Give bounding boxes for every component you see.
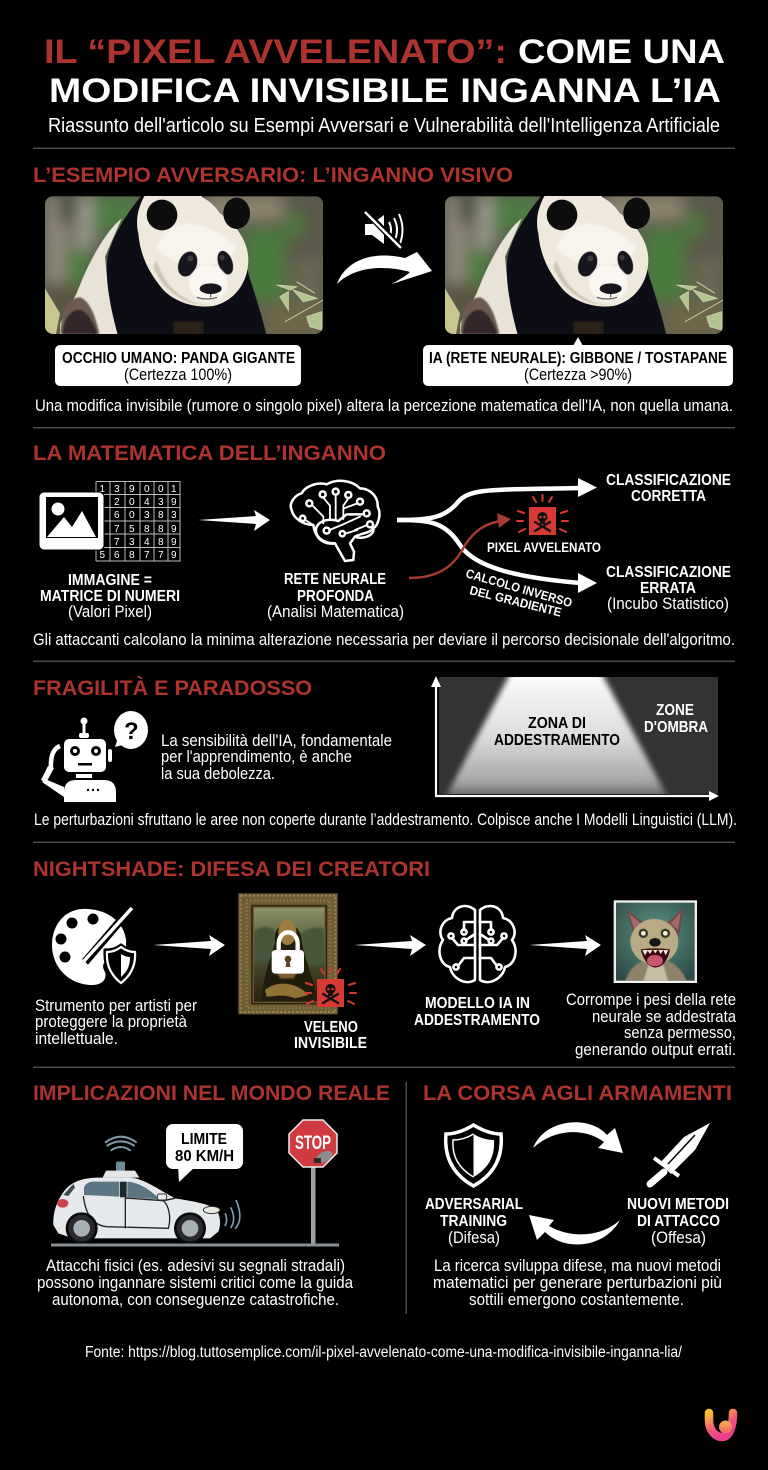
text: sensitivity (161, 731, 392, 783)
text: physical attacks: autonoma, con conseguenze catastrofiche. (52, 1290, 339, 1309)
icon: number matrix: 2 (114, 497, 120, 508)
stop sign (289, 1120, 337, 1244)
heading: LA CORSA AGLI ARMAMENTI (423, 1082, 732, 1105)
speech bubble: speed limit (166, 1124, 243, 1182)
text: sensitivity: la sua debolezza. (161, 764, 275, 783)
title: IL “PIXEL AVVELENATO”: (44, 33, 507, 71)
text: physical attacks: possono ingannare sistemi critici come la guida (37, 1273, 353, 1292)
arrow: wrong branch (397, 520, 597, 593)
label: adversarial training: TRAINING (440, 1213, 507, 1230)
icon: number matrix: 7 (114, 537, 120, 548)
icon: number matrix: 7 (144, 550, 150, 561)
icon: number matrix: 0 (129, 497, 135, 508)
icon: number matrix: 8 (158, 537, 164, 548)
label: wrong classification: ERRATA (640, 580, 696, 597)
label: inverse gradient: CALCOLO INVERSO (464, 566, 574, 610)
label: correct classification: CLASSIFICAZIONE (606, 472, 731, 489)
label: invisible poison (294, 1019, 367, 1052)
icon: number matrix: 1 (100, 484, 106, 495)
painting: protected artwork (238, 893, 338, 1014)
icon: number matrix (96, 482, 180, 561)
icon: number matrix: 9 (171, 550, 177, 561)
icon: palette with shield (52, 906, 137, 985)
icon: number matrix: 0 (158, 484, 164, 495)
arrow: attack to defense (529, 1215, 620, 1244)
label: neural network (423, 337, 733, 386)
text: physical attacks (37, 1256, 353, 1309)
heading: FRAGILITÀ E PARADOSSO (33, 677, 312, 700)
icon: poison pixel (517, 495, 568, 535)
label: wrong classification (606, 564, 731, 613)
source line: Fonte: https://blog.tuttosemplice.com/il-pixel-avvelenato-come-una-modifica-invisibile-inganna-lia/ (85, 1344, 683, 1361)
icon: number matrix: 6 (114, 510, 120, 521)
icon: number matrix: 5 (100, 550, 106, 561)
text: physical attacks: Attacchi fisici (es. adesivi su segnali stradali) (46, 1256, 345, 1275)
label: poison pixel: PIXEL AVVELENATO (487, 540, 601, 555)
speech bubble: speed limit: LIMITE (181, 1131, 227, 1148)
icon: number matrix: 8 (144, 524, 150, 535)
panel: adversarial example (33, 164, 733, 415)
label: adversarial training: ADVERSARIAL (425, 1196, 523, 1213)
label: human eye: OCCHIO UMANO: PANDA GIGANTE (62, 350, 295, 367)
chart: training zone: ADDESTRAMENTO (494, 732, 620, 749)
title: MODIFICA INVISIBILE INGANNA L’IA (49, 72, 721, 110)
label: new attack methods: NUOVI METODI (627, 1196, 729, 1213)
text: arms race: La ricerca sviluppa difese, ma nuovi metodi (434, 1256, 721, 1275)
text: arms race (433, 1256, 722, 1309)
text: tool for artists: intellettuale. (35, 1029, 118, 1048)
text: sensitivity: per l'apprendimento, è anche (161, 747, 352, 766)
text: arms race: matematici per generare perturbazioni più (433, 1273, 722, 1292)
icon: number matrix: 8 (158, 524, 164, 535)
text: corrupts weights: generando output errati. (575, 1040, 736, 1059)
label: correct classification: CORRETTA (631, 488, 706, 505)
label: wrong classification: (Incubo Statistico) (607, 594, 729, 613)
label: model in training: ADDESTRAMENTO (414, 1012, 540, 1029)
label: correct classification (606, 472, 731, 505)
icon: shield (446, 1125, 501, 1186)
text: corrupts weights (566, 990, 736, 1059)
chart: training zone: ZONE (656, 702, 694, 719)
panel: nightshade (33, 858, 736, 1059)
label: human eye: (Certezza 100%) (124, 365, 232, 384)
icon: muted speaker (365, 212, 402, 249)
label: deep neural network (267, 571, 404, 621)
logo (709, 1413, 733, 1437)
icon: brain front view (439, 906, 516, 982)
text: tool for artists: Strumento per artisti per (35, 996, 197, 1015)
panel: arms race (423, 1082, 732, 1309)
icon: number matrix: 8 (129, 550, 135, 561)
icon: number matrix: 1 (171, 484, 177, 495)
icon: number matrix: 3 (114, 484, 120, 495)
road line (51, 1244, 339, 1246)
icon: confused robot (41, 711, 148, 802)
icon: image (39, 492, 104, 550)
icon: padlock (272, 932, 304, 974)
arrow: tool to artwork (153, 935, 225, 956)
icon: number matrix: 6 (114, 550, 120, 561)
arrow: original to perturbed (337, 252, 432, 284)
panel: mathematics of deception (33, 442, 735, 649)
label: new attack methods (627, 1196, 729, 1247)
label: wrong classification: CLASSIFICAZIONE (606, 564, 731, 581)
icon: sword (650, 1123, 710, 1184)
label: image equals matrix: (Valori Pixel) (68, 602, 152, 621)
icon: number matrix: 4 (144, 537, 150, 548)
heading: LA MATEMATICA DELL’INGANNO (33, 442, 386, 465)
icon: number matrix: 3 (158, 497, 164, 508)
title: COME UNA (518, 33, 725, 71)
icon: number matrix: 4 (144, 497, 150, 508)
label: image equals matrix (40, 572, 180, 621)
label: neural network: IA (RETE NEURALE): GIBBONE / TOSTAPANE (429, 350, 727, 367)
arrow: poison injection (409, 513, 511, 578)
label: invisible poison: INVISIBILE (294, 1035, 367, 1052)
arrow: image to network (198, 510, 270, 531)
label: model in training (414, 995, 540, 1029)
icon: brain (291, 481, 379, 561)
heading: IMPLICAZIONI NEL MONDO REALE (33, 1082, 390, 1105)
label: adversarial training: (Difesa) (448, 1228, 500, 1247)
text: sensitivity: La sensibilità dell'IA, fondamentale (161, 731, 392, 750)
icon: number matrix: 9 (171, 537, 177, 548)
text: corrupts weights: senza permesso, (624, 1023, 736, 1042)
panel: real world implications (33, 1082, 390, 1309)
chart: training zone: ZONA DI (528, 715, 586, 732)
text: tool for artists (35, 996, 197, 1048)
subtitle: Riassunto dell'articolo su Esempi Avversari e Vulnerabilità dell'Intelligenza Artificiale (48, 115, 720, 137)
label: image equals matrix: IMMAGINE = (68, 572, 152, 589)
label: deep neural network: PROFONDA (297, 588, 374, 605)
panel: fragility and paradox (33, 670, 737, 829)
icon: number matrix: 9 (129, 484, 135, 495)
icon: number matrix: 0 (129, 510, 135, 521)
icon: number matrix: 3 (129, 537, 135, 548)
text: tool for artists: proteggere la proprietà (35, 1012, 187, 1031)
title (44, 33, 725, 110)
icon: number matrix: 8 (158, 510, 164, 521)
label: deep neural network: RETE NEURALE (284, 571, 386, 588)
icon: number matrix: 9 (171, 524, 177, 535)
heading: NIGHTSHADE: DIFESA DEI CREATORI (33, 858, 430, 881)
label: new attack methods: (Offesa) (651, 1228, 706, 1247)
label: model in training: MODELLO IA IN (425, 995, 530, 1012)
speech bubble: speed limit: 80 KM/H (175, 1148, 234, 1165)
chart: training zone: D'OMBRA (644, 719, 708, 736)
text: arms race: sottili emergono costantemente. (469, 1290, 684, 1309)
heading: L’ESEMPIO AVVERSARIO: L’INGANNO VISIVO (33, 164, 513, 187)
icon: number matrix: 3 (144, 510, 150, 521)
icon: number matrix: 7 (158, 550, 164, 561)
icon: number matrix: 5 (129, 524, 135, 535)
stop sign: STOP (295, 1133, 331, 1154)
label: deep neural network: (Analisi Matematica) (267, 602, 404, 621)
arrow: correct branch (397, 478, 597, 520)
label: image equals matrix: MATRICE DI NUMERI (40, 588, 180, 605)
text: corrupts weights: Corrompe i pesi della rete (566, 990, 736, 1009)
arrow: artwork to model (354, 935, 426, 956)
label: neural network: (Certezza >90%) (524, 365, 632, 384)
label: new attack methods: DI ATTACCO (637, 1213, 720, 1230)
icon: number matrix: 3 (171, 510, 177, 521)
label: inverse gradient: DEL GRADIENTE (468, 583, 563, 620)
label: human eye (55, 345, 301, 386)
panda photo perturbed (445, 193, 723, 337)
text: corrupts weights: neurale se addestrata (592, 1007, 736, 1026)
arrow: model to output (529, 935, 601, 956)
icon: number matrix: 9 (171, 497, 177, 508)
label: invisible poison: VELENO (304, 1019, 358, 1036)
label: adversarial training (425, 1196, 523, 1247)
icon: number matrix: 7 (114, 524, 120, 535)
image: corrupted output dog (614, 900, 697, 983)
panda photo original (45, 193, 323, 337)
icon: confused robot: ? (124, 718, 139, 745)
chart: training zone (431, 670, 719, 801)
icon: poison marker (305, 967, 356, 1007)
arrow: defense to attack (533, 1122, 623, 1153)
icon: self-driving car (53, 1137, 240, 1244)
icon: number matrix: 0 (144, 484, 150, 495)
